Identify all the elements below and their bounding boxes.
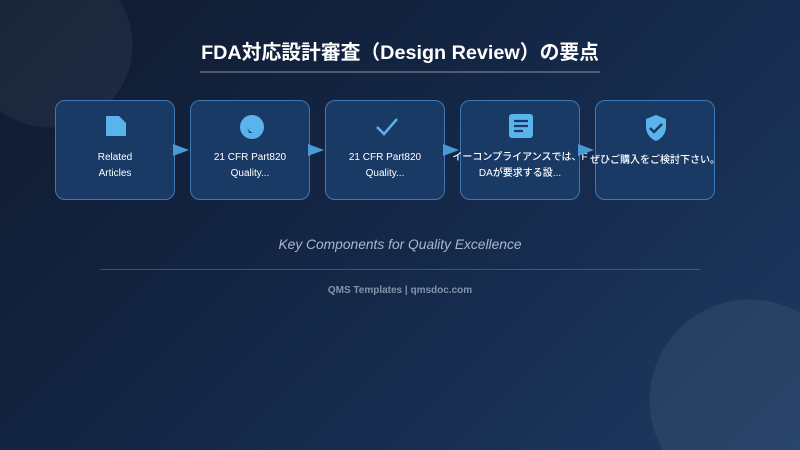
- subtitle: Key Components for Quality Excellence: [278, 237, 522, 252]
- arrow 1: [173, 144, 189, 156]
- icon: document: [106, 116, 126, 136]
- step 4: [460, 100, 580, 200]
- step 4: DAが要求する設...: [479, 168, 561, 178]
- arrow 4: [578, 144, 594, 156]
- step 3: [325, 100, 445, 200]
- step 3: Quality...: [366, 168, 404, 178]
- step 3: 21 CFR Part820: [349, 152, 421, 163]
- icon: shield: [646, 115, 666, 141]
- arrow 2: [308, 144, 324, 156]
- step 1: Related Articles: Articles: [99, 168, 131, 178]
- arrow 3: [443, 144, 459, 156]
- step 2: Quality...: [231, 168, 269, 178]
- step 5: [595, 100, 715, 200]
- step 2: [190, 100, 310, 200]
- icon: check: [376, 118, 398, 136]
- step 1: Related Articles: [55, 100, 175, 200]
- step 5: ぜひご購入をご検討下さい。: [590, 155, 720, 166]
- icon: list: [509, 114, 533, 138]
- step 1: Related Articles: Related: [98, 152, 132, 163]
- title: FDA対応設計審査（Design Review）の要点: [201, 42, 599, 64]
- step 4: イーコンプライアンスでは、F: [452, 152, 588, 163]
- step 2: 21 CFR Part820: [214, 152, 286, 163]
- footer: QMS Templates | qmsdoc.com: [328, 285, 472, 296]
- icon: circle: [240, 115, 264, 139]
